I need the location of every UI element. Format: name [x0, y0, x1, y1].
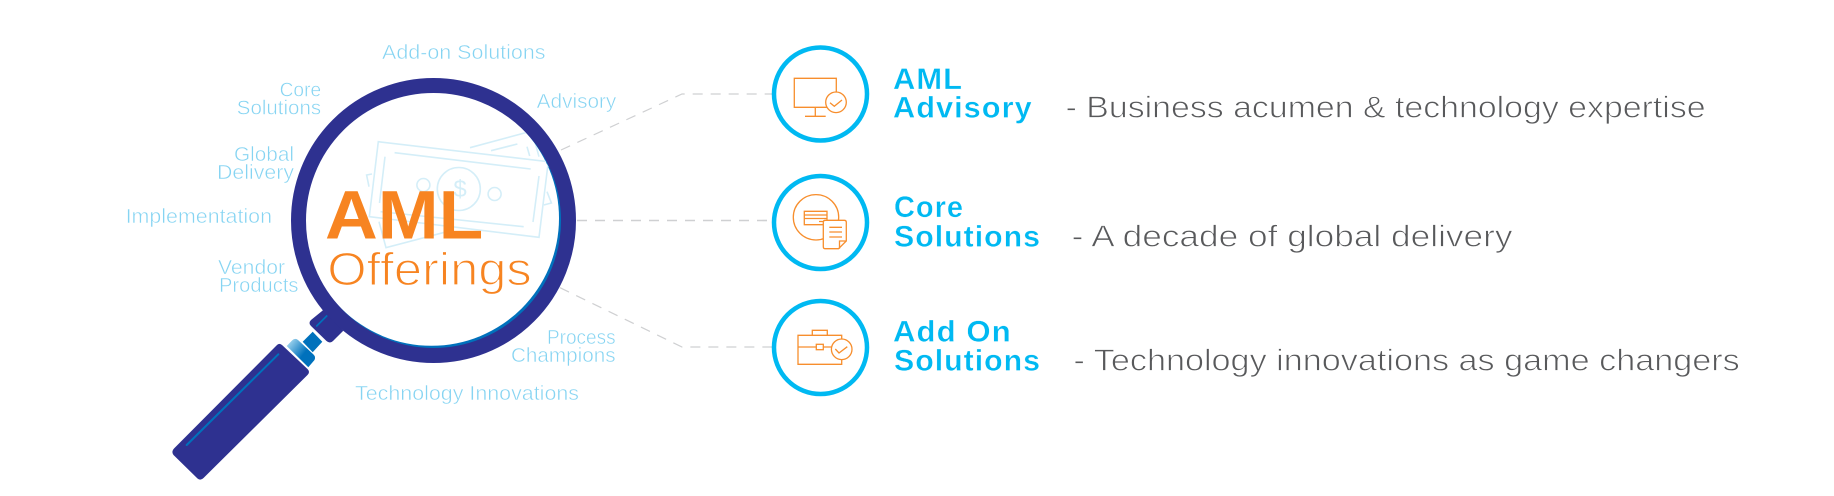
title: Offerings: Offerings — [327, 243, 532, 295]
handle highlight — [187, 354, 278, 445]
connector: core solutions — [577, 220, 772, 222]
infographic canvas — [128, 44, 1738, 480]
heading: Add On — [893, 316, 1012, 349]
icon ring — [774, 176, 867, 269]
label: core solutions: Core — [280, 79, 321, 102]
label: process champions — [511, 326, 616, 367]
icon: briefcase with check — [798, 330, 852, 364]
row: Core Solutions — [774, 176, 1513, 269]
heading: Advisory — [893, 92, 1033, 125]
label: vendor products — [218, 256, 298, 297]
icon ring — [774, 301, 867, 394]
heading — [893, 63, 1033, 125]
description: - Business acumen & technology expertise — [1066, 91, 1706, 125]
handle grip — [172, 344, 309, 480]
label: vendor products: Products — [219, 274, 298, 297]
label: vendor products: Vendor — [218, 256, 285, 279]
heading: Solutions — [894, 345, 1041, 378]
label: process champions: Process — [547, 326, 616, 349]
label: technology innovations: Technology Innovations — [355, 382, 579, 405]
watermark: banknote: $ — [453, 176, 467, 203]
ring — [298, 86, 568, 356]
label: advisory: Advisory — [537, 90, 617, 113]
magnifying glass — [172, 86, 568, 480]
heading: Core — [894, 191, 964, 224]
offering labels around the magnifier — [126, 41, 617, 405]
heading — [894, 191, 1041, 254]
icon: card and document — [793, 195, 846, 249]
icon ring — [774, 48, 867, 140]
lens — [304, 90, 564, 350]
label: global delivery: Global — [234, 143, 294, 166]
heading — [893, 316, 1041, 378]
watermark: banknote — [367, 131, 551, 248]
heading: Solutions — [894, 221, 1041, 254]
label: global delivery — [217, 143, 295, 184]
label: core solutions — [237, 79, 321, 120]
label: add-on solutions: Add-on Solutions — [382, 41, 546, 64]
connector: advisory — [561, 94, 772, 150]
connector: add-on solutions — [560, 288, 772, 347]
label: global delivery: Delivery — [217, 161, 295, 184]
icon: monitor with check — [794, 78, 846, 116]
handle neck — [287, 339, 315, 367]
label: implementation: Implementation — [126, 205, 272, 228]
description: - Technology innovations as game changers — [1074, 344, 1740, 378]
row: Add On Solutions — [774, 301, 1740, 394]
heading: AML — [893, 63, 963, 96]
row: AML Advisory — [774, 48, 1706, 140]
collar highlight — [317, 315, 328, 326]
description: - A decade of global delivery — [1072, 220, 1513, 254]
handle connector — [303, 332, 322, 352]
title: AML: AML — [325, 176, 483, 253]
label: core solutions: Solutions — [237, 97, 321, 120]
label: process champions: Champions — [511, 344, 616, 367]
handle collar — [310, 310, 343, 342]
